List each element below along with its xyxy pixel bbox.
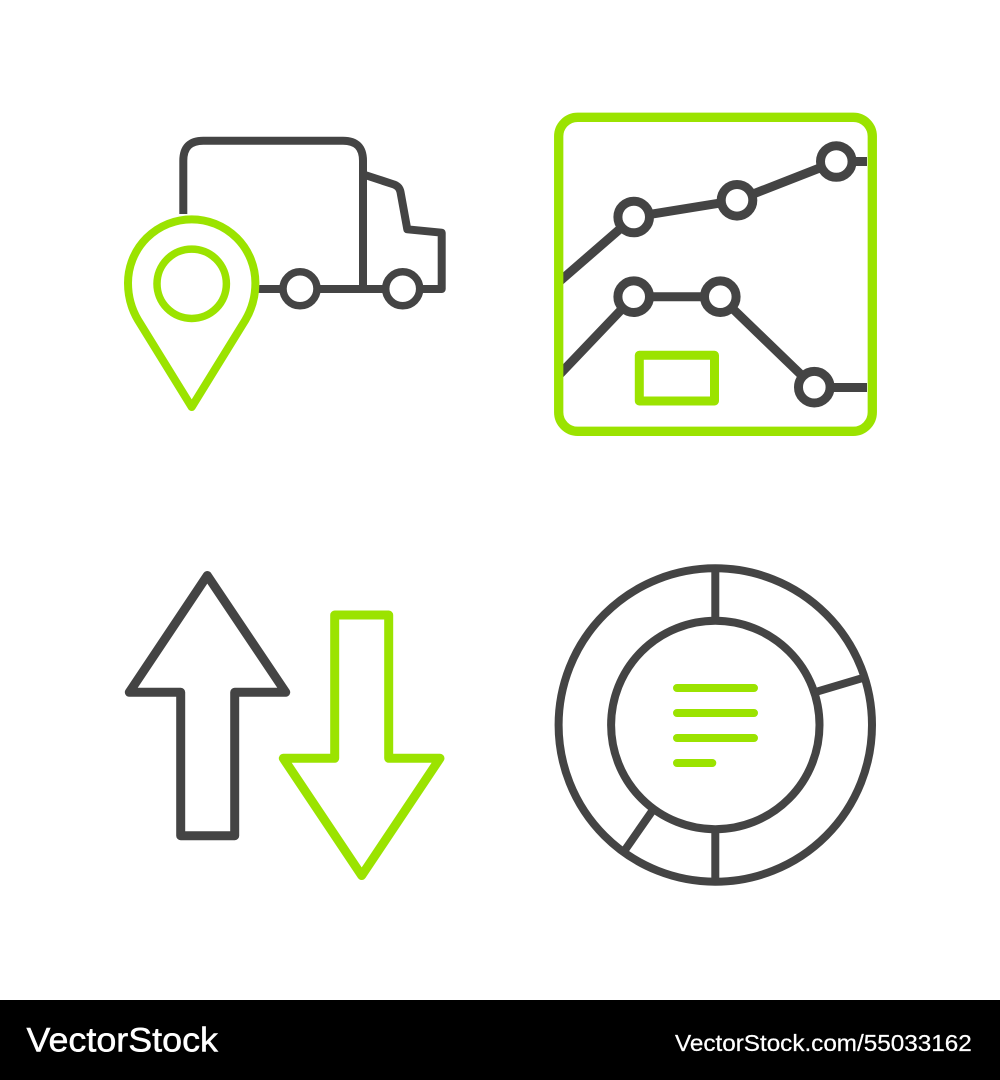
truck body <box>183 141 442 306</box>
upper data line <box>560 146 867 281</box>
legend box <box>639 355 714 401</box>
down arrow <box>283 615 440 876</box>
up arrow <box>129 576 286 836</box>
donut rings and segments <box>559 568 872 882</box>
chart frame <box>559 117 872 431</box>
brand name: VectorStock <box>26 1022 219 1060</box>
icon: line chart panel <box>559 117 872 431</box>
icon: up and down arrows <box>129 576 440 876</box>
footer bar <box>0 1000 1000 1080</box>
text lines <box>677 688 754 763</box>
image url: VectorStock.com/55033162 <box>675 1030 972 1056</box>
icon: delivery truck with location pin <box>128 141 442 407</box>
lower data line <box>560 281 867 403</box>
icon: donut chart <box>559 568 872 882</box>
location pin <box>128 219 255 407</box>
